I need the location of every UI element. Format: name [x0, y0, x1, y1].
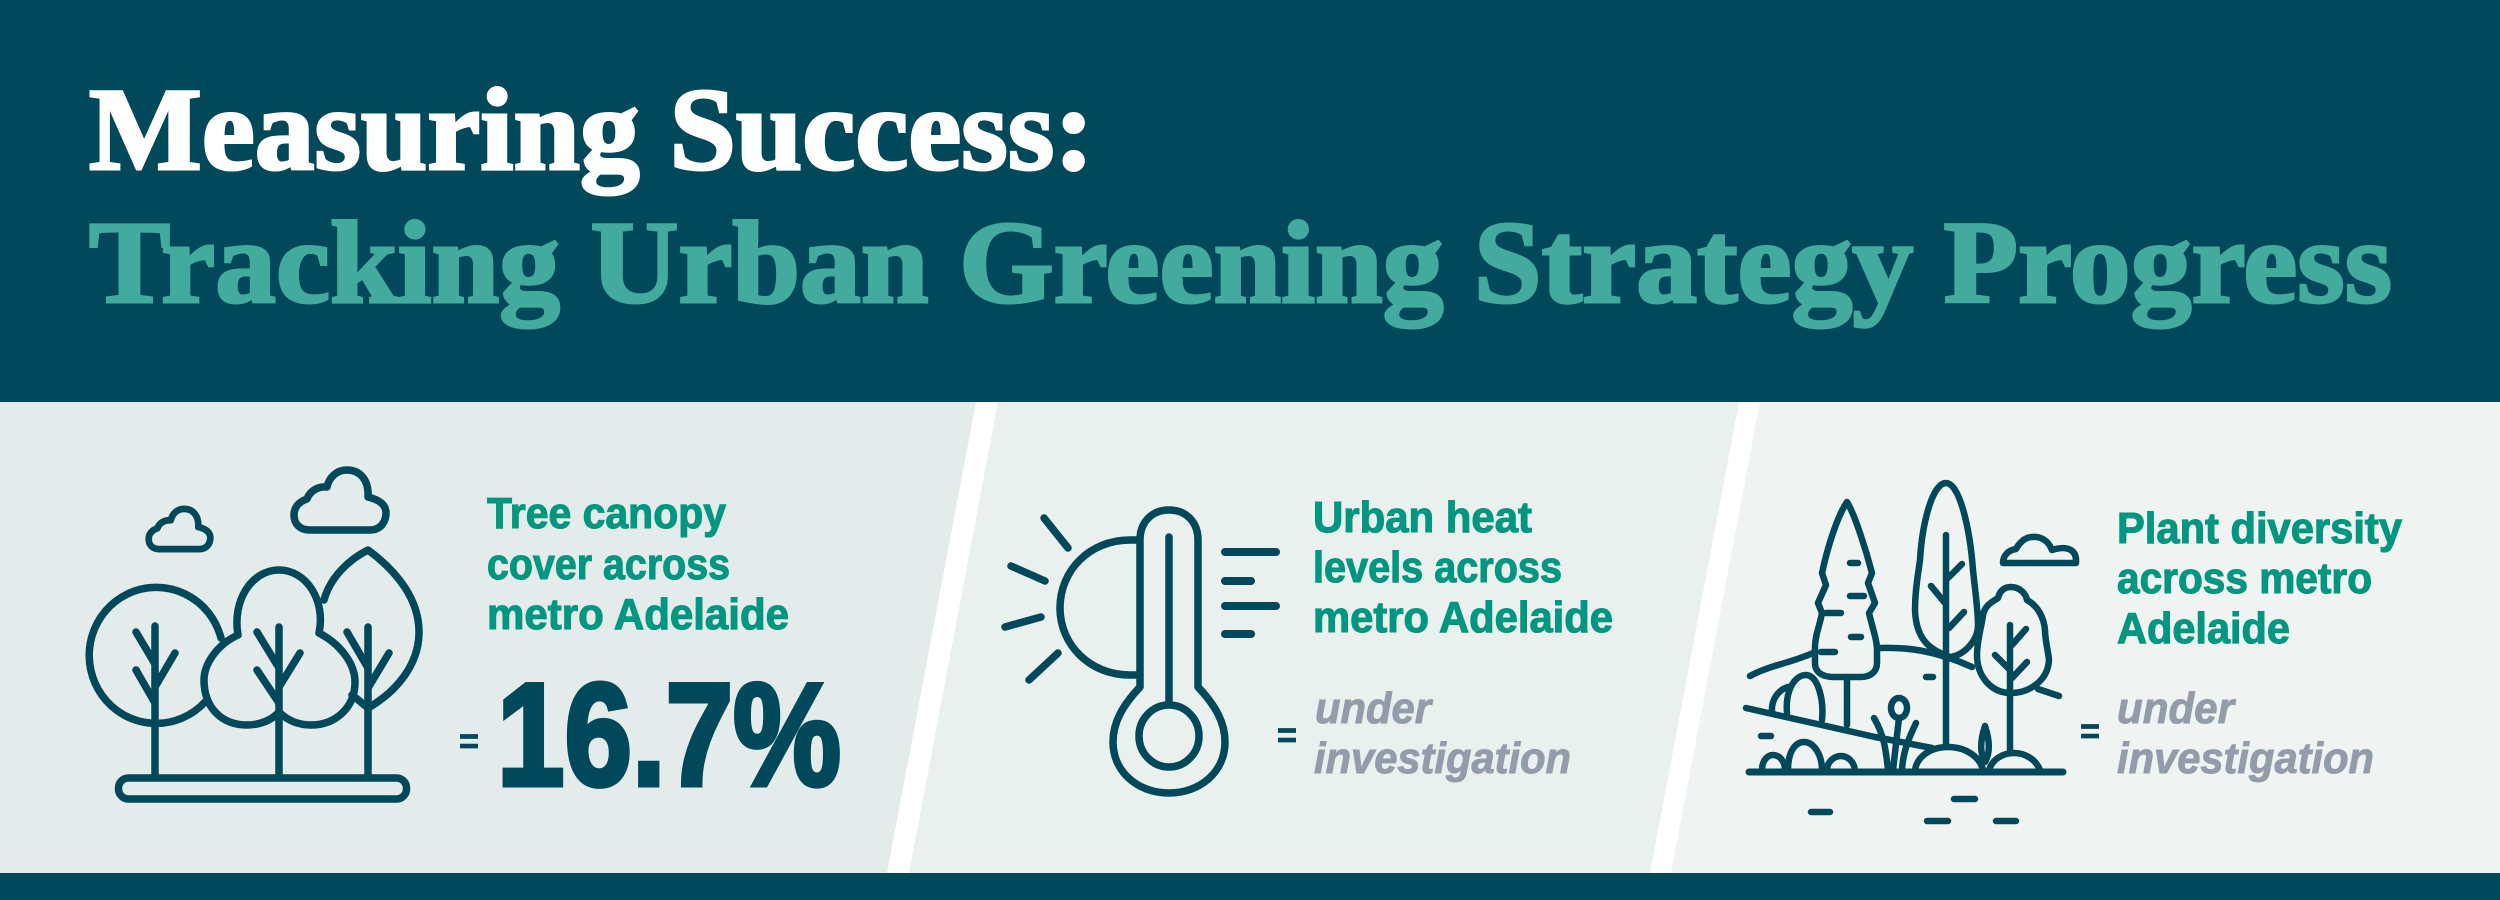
title line 2: Tracking Urban Greening Strategy Progress	[89, 197, 2392, 328]
panel: urban heat	[909, 402, 1739, 873]
label: tree canopy cover: cover across	[487, 540, 730, 589]
status: under investigation	[2117, 684, 2374, 783]
label: urban heat levels: metro Adelaide	[1313, 593, 1613, 642]
label: tree canopy cover	[487, 489, 789, 639]
label: tree canopy cover: metro Adelaide	[487, 590, 789, 639]
status: under investigation: investigation	[1314, 734, 1571, 783]
status: under investigation: under	[2117, 684, 2237, 733]
label: urban heat levels: Urban heat	[1313, 493, 1532, 542]
status: under investigation	[1314, 684, 1571, 783]
label: urban heat levels: levels across	[1313, 543, 1562, 592]
label: plant diversity: across metro	[2117, 554, 2372, 603]
panel: plant diversity	[1671, 402, 2500, 873]
label: urban heat levels	[1313, 493, 1613, 642]
status: under investigation: investigation	[2117, 734, 2374, 783]
label: plant diversity: Adelaide	[2117, 604, 2290, 653]
icon: park landscape	[1746, 483, 2076, 821]
value: 16.7%: 16.7%	[497, 653, 841, 816]
equals sign: =	[459, 720, 479, 761]
panel: tree canopy	[0, 402, 976, 873]
icon: thermometer and sun	[1005, 510, 1276, 793]
title line 1: Measuring Success:	[89, 64, 1094, 195]
equals sign: =	[1277, 714, 1297, 755]
label: plant diversity: Plant diversity	[2117, 504, 2403, 553]
header band	[0, 0, 2500, 402]
label: tree canopy cover: Tree canopy	[487, 489, 726, 538]
label: plant diversity	[2117, 504, 2403, 653]
equals sign: =	[2080, 710, 2100, 751]
icon: trees and clouds	[89, 470, 419, 799]
footer band	[0, 873, 2500, 900]
status: under investigation: under	[1315, 684, 1434, 733]
